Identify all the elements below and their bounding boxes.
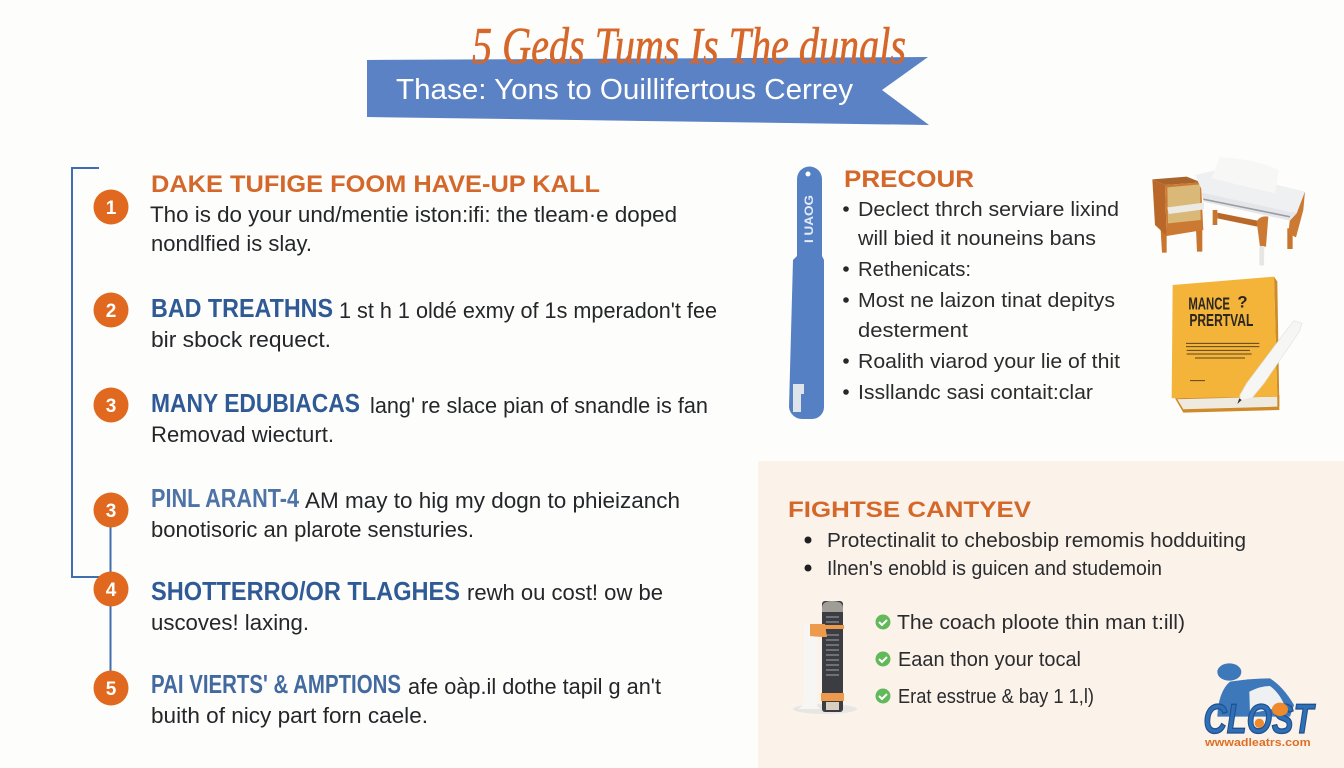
item 1: DAKE TUFIGE FOOM HAVE-UP KALL	[151, 171, 600, 198]
item 2: bir sbock requect.	[151, 327, 331, 352]
item 2: BAD TREATHNS	[151, 293, 333, 323]
item 2: 2	[106, 301, 116, 322]
list text: Most ne laizon tinat depitys	[858, 290, 1115, 312]
item 4: bonotisoric an plarote sensturies.	[151, 517, 474, 542]
item 5: uscoves! laxing.	[151, 610, 309, 635]
bullet text	[827, 530, 1246, 580]
icon: yellow book with pen: ?	[1237, 292, 1248, 311]
check 1: The coach ploote thin man t:ill)	[897, 612, 1185, 634]
list text: Issllandc sasi contait:clar	[858, 382, 1093, 404]
item 6: PAI VIERTS' & AMPTIONS	[151, 669, 401, 699]
check 2: Eaan thon your tocal	[898, 649, 1081, 671]
checklist	[876, 612, 1185, 708]
item 3: MANY EDUBIACAS	[151, 388, 360, 418]
list text: desterment	[858, 320, 968, 342]
panel: fightse cantyev	[788, 497, 1246, 580]
bullet text: Protectinalit to chebosbip remomis hodduiting	[827, 530, 1246, 552]
item 5: 4	[106, 580, 117, 601]
item 3: 3	[106, 396, 116, 417]
icon: yellow book with pen	[1172, 277, 1302, 413]
list text: Declect thrch serviare lixind	[858, 199, 1119, 221]
bullet text: Ilnen's enobld is guicen and studemoin	[827, 558, 1162, 580]
list text: Roalith viarod your lie of thit	[858, 351, 1120, 373]
title banner	[367, 18, 929, 125]
icon: yellow book with pen: MANCE	[1188, 293, 1230, 313]
item 6: buith of nicy part forn caele.	[151, 703, 428, 728]
subtitle: Thase: Yons to Ouillifertous Cerrey	[396, 74, 853, 106]
logo: CLOST	[1203, 695, 1316, 742]
item 3: lang' re slace pian of snandle is fan	[370, 393, 708, 418]
item 6: afe oàp.il dothe tapil g an't	[408, 674, 661, 699]
item 3: Removad wiecturt.	[151, 422, 334, 447]
item 2: 1 st h 1 oldé exmy of 1s mperadon't fee	[339, 298, 717, 323]
item 1: Tho is do your und/mentie iston:ifi: the tleam·e doped	[150, 202, 677, 227]
icon: tube on stand	[793, 601, 857, 714]
item 4	[94, 483, 680, 542]
icon: desk and cabinet	[1152, 157, 1305, 265]
list text	[857, 199, 1120, 404]
item 6: 5	[106, 679, 117, 700]
bullets	[804, 536, 812, 572]
item 4: PINL ARANT-4	[151, 483, 299, 513]
item 1: 1	[106, 198, 117, 219]
list text: will bied it nouneins bans	[857, 228, 1096, 250]
icon: blue spatula	[789, 166, 824, 419]
item 4: 3	[106, 501, 116, 522]
logo: wwwadleatrs.com	[1204, 737, 1311, 749]
logo	[1203, 663, 1316, 749]
item 1: nondlfied is slay.	[151, 231, 312, 256]
item 2	[94, 292, 717, 352]
heading: FIGHTSE CANTYEV	[788, 497, 1031, 522]
item 3	[94, 388, 708, 447]
heading: PRECOUR	[844, 166, 974, 193]
panel: precour list	[843, 166, 1120, 404]
check 3: Erat esstrue & bay 1 1,l)	[898, 686, 1094, 708]
item 4: AM may to hig my dogn to phieizanch	[305, 488, 680, 513]
ribbon	[367, 57, 929, 125]
list text: Rethenicats:	[858, 259, 971, 281]
item 5	[94, 572, 663, 635]
title: 5 Geds Tums Is The dunals	[472, 18, 906, 75]
icon: blue spatula: I UAOG	[802, 195, 816, 243]
item 1	[94, 171, 677, 256]
icon: yellow book with pen: PRERTVAL	[1189, 310, 1253, 330]
timeline connector	[72, 168, 110, 675]
bullets	[843, 206, 849, 395]
item 6	[94, 669, 661, 728]
item 5: SHOTTERRO/OR TLAGHES	[151, 576, 460, 606]
panel: lower right tinted background	[758, 461, 1344, 768]
item 5: rewh ou cost! ow be	[467, 580, 663, 605]
